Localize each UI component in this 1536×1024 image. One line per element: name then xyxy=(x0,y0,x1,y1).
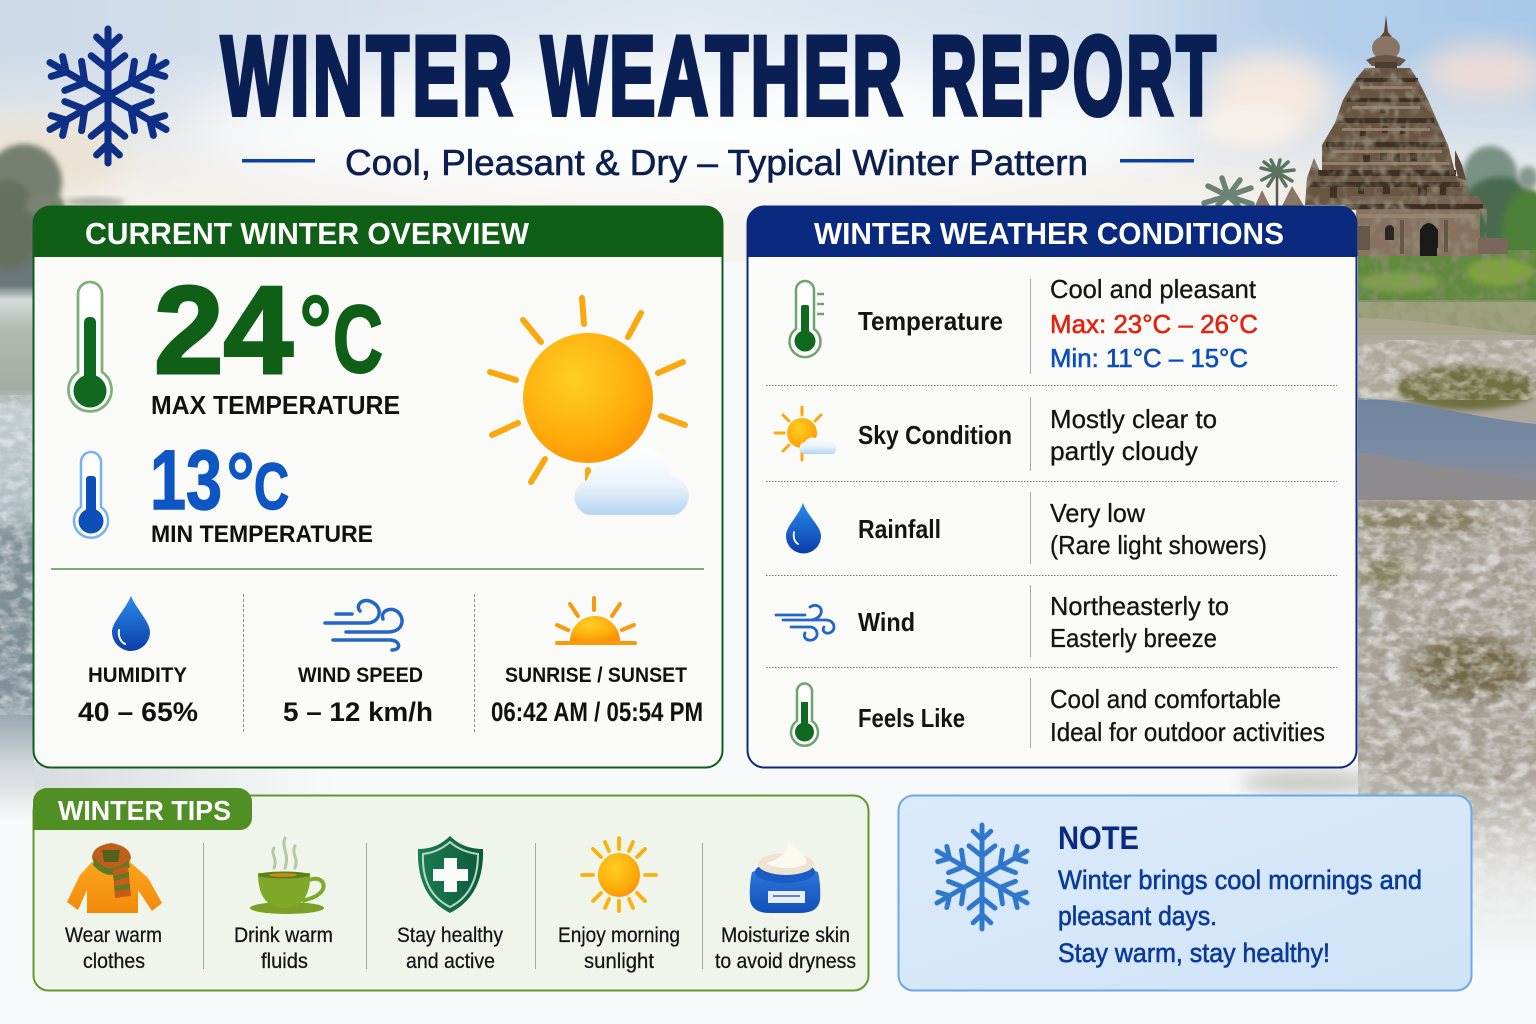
overview header xyxy=(33,206,723,257)
row: rainfall: (Rare light showers) xyxy=(1050,530,1267,560)
row: feels like xyxy=(791,684,1325,747)
stat: sunrise and sunset xyxy=(491,598,703,727)
stat: wind speed xyxy=(283,601,433,727)
panel: winter weather conditions xyxy=(747,206,1357,768)
row: sky condition xyxy=(775,404,1217,466)
tip: stay healthy and active: Stay healthy xyxy=(397,924,503,947)
tip: moisturize skin: Moisturize skin xyxy=(721,924,850,947)
left trees and frosted bank xyxy=(0,144,334,820)
row: rainfall: Very low xyxy=(1050,498,1145,528)
tip: wear warm clothes: clothes xyxy=(83,950,145,973)
title: WEATHER xyxy=(541,14,902,139)
icon: sun xyxy=(582,838,656,911)
icon: cream jar xyxy=(750,843,820,913)
tip: drink warm fluids: fluids xyxy=(261,950,308,973)
title: WINTER xyxy=(221,14,512,139)
winter tips tab xyxy=(33,788,252,830)
note heading: NOTE xyxy=(1058,820,1139,856)
row: feels like: Feels Like xyxy=(858,703,965,733)
stat: sunrise and sunset: 06:42 AM / 05:54 PM xyxy=(491,697,703,727)
icon: sun behind cloud xyxy=(490,298,689,515)
panel: note xyxy=(898,796,1472,990)
icon: humidity drop xyxy=(112,596,150,651)
tip: moisturize skin xyxy=(715,843,856,973)
row: rainfall: Rainfall xyxy=(858,514,941,544)
icon: thermometer xyxy=(791,684,818,746)
icon: orange coat with scarf xyxy=(67,843,162,913)
stat: humidity: HUMIDITY xyxy=(88,664,187,687)
min temperature value xyxy=(150,433,289,533)
title: REPORT xyxy=(930,14,1216,139)
row: wind: Wind xyxy=(858,607,915,637)
icon: rain drop xyxy=(786,503,821,554)
tip: stay healthy and active xyxy=(397,836,503,973)
icon: wind xyxy=(776,605,834,640)
icon: green cup with steam xyxy=(250,838,324,914)
icon: thermometer xyxy=(789,281,824,357)
tip: enjoy morning sunlight xyxy=(558,838,680,973)
stat: wind speed: 5 – 12 km/h xyxy=(283,697,433,727)
conditions header xyxy=(747,206,1357,257)
row: wind: Easterly breeze xyxy=(1050,623,1217,653)
conditions header: WINTER WEATHER CONDITIONS xyxy=(814,216,1284,251)
title xyxy=(221,14,1216,139)
note text: pleasant days. xyxy=(1058,901,1217,931)
tip: wear warm clothes: Wear warm xyxy=(65,924,162,947)
panel: current winter overview xyxy=(33,206,723,768)
row: temperature: Max: 23°C – 26°C xyxy=(1050,309,1258,339)
min temperature label: MIN TEMPERATURE xyxy=(151,521,373,548)
max temperature value: 24 xyxy=(154,262,293,400)
row: sky condition: Mostly clear to xyxy=(1050,404,1217,434)
icon: title snowflake xyxy=(42,29,174,163)
overview header: CURRENT WINTER OVERVIEW xyxy=(85,216,530,251)
icon: blue thermometer xyxy=(74,452,108,538)
icon: green thermometer xyxy=(68,282,112,411)
icon: sun and cloud xyxy=(775,407,836,460)
note text: Winter brings cool mornings and xyxy=(1058,865,1422,895)
subtitle: Cool, Pleasant & Dry – Typical Winter Pattern xyxy=(345,142,1088,183)
icon: note snowflake xyxy=(930,825,1034,929)
note text: Stay warm, stay healthy! xyxy=(1058,938,1330,968)
winter tips tab: WINTER TIPS xyxy=(58,795,231,826)
note text xyxy=(1058,865,1422,968)
tip: wear warm clothes xyxy=(65,843,162,973)
row: rainfall xyxy=(786,498,1267,560)
tip: enjoy morning sunlight: sunlight xyxy=(584,950,654,973)
max temperature label: MAX TEMPERATURE xyxy=(151,390,400,420)
row: temperature: Min: 11°C – 15°C xyxy=(1050,343,1248,373)
icon: shield with cross xyxy=(418,836,483,913)
palm trees xyxy=(1204,160,1304,206)
tip: stay healthy and active: and active xyxy=(406,950,495,973)
sky xyxy=(0,0,1536,262)
temple xyxy=(1300,15,1508,256)
tip: moisturize skin: to avoid dryness xyxy=(715,950,856,973)
right ground, river and frosted plants xyxy=(1240,250,1536,965)
tip: enjoy morning sunlight: Enjoy morning xyxy=(558,924,680,947)
stat: wind speed: WIND SPEED xyxy=(298,664,423,687)
icon: sunrise xyxy=(555,598,637,645)
row: feels like: Cool and comfortable xyxy=(1050,684,1281,714)
max temperature value: C xyxy=(333,286,383,393)
row: feels like: Ideal for outdoor activities xyxy=(1050,717,1325,747)
stat: humidity xyxy=(78,596,198,727)
min temperature value: C xyxy=(254,449,289,523)
trees behind temple xyxy=(1455,146,1536,274)
row: sky condition: Sky Condition xyxy=(858,420,1012,450)
panel: winter tips xyxy=(33,788,868,990)
row: sky condition: partly cloudy xyxy=(1050,436,1198,466)
max temperature value xyxy=(154,262,383,400)
row: wind: Northeasterly to xyxy=(1050,591,1229,621)
tip: drink warm fluids: Drink warm xyxy=(234,924,333,947)
min temperature value: 13 xyxy=(150,433,222,527)
row: wind xyxy=(776,591,1229,653)
min temperature value: ° xyxy=(226,434,255,533)
stat: humidity: 40 – 65% xyxy=(78,697,198,727)
tip: drink warm fluids xyxy=(234,838,333,973)
icon: wind xyxy=(325,601,402,650)
max temperature value: ° xyxy=(299,275,332,387)
row: temperature xyxy=(789,274,1258,373)
row: temperature: Temperature xyxy=(858,306,1003,336)
row: temperature: Cool and pleasant xyxy=(1050,274,1257,304)
stat: sunrise and sunset: SUNRISE / SUNSET xyxy=(505,664,687,687)
